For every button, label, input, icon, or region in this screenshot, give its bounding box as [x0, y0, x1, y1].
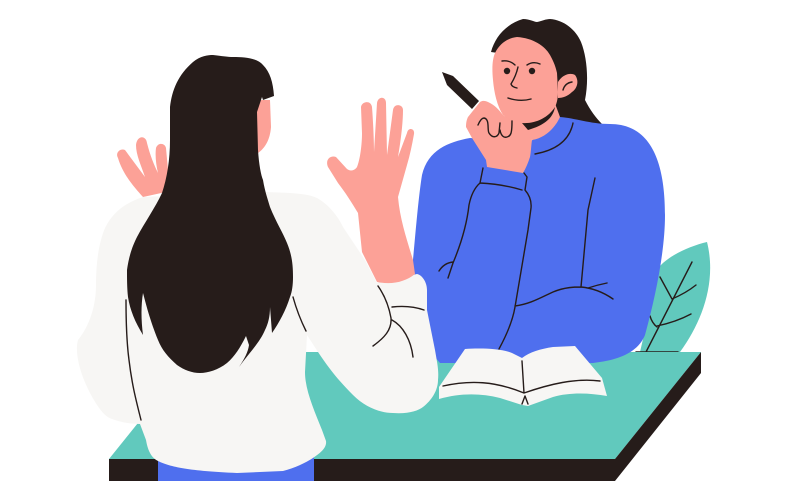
facial lines — [502, 61, 572, 100]
person: listening woman in blue sweater — [412, 19, 665, 363]
neck — [500, 98, 560, 140]
far hand — [117, 137, 175, 197]
sweater lines — [439, 123, 613, 349]
raised hand on chin — [466, 101, 532, 173]
long hair — [127, 55, 293, 373]
pen — [442, 72, 479, 109]
neck shadow — [522, 107, 555, 130]
person: woman seen from behind — [77, 55, 438, 481]
shirt — [77, 192, 438, 473]
finger lines — [478, 118, 512, 137]
table — [109, 352, 701, 481]
back hair — [491, 19, 602, 125]
shirt lines — [126, 286, 424, 420]
sweater — [412, 117, 665, 363]
open book — [439, 346, 607, 406]
plant leaf — [636, 242, 710, 352]
skirt — [158, 450, 314, 481]
face — [492, 37, 558, 122]
head side — [255, 100, 271, 153]
eyes — [504, 68, 535, 74]
near arm and raised hand — [327, 98, 415, 283]
ear — [558, 74, 577, 98]
